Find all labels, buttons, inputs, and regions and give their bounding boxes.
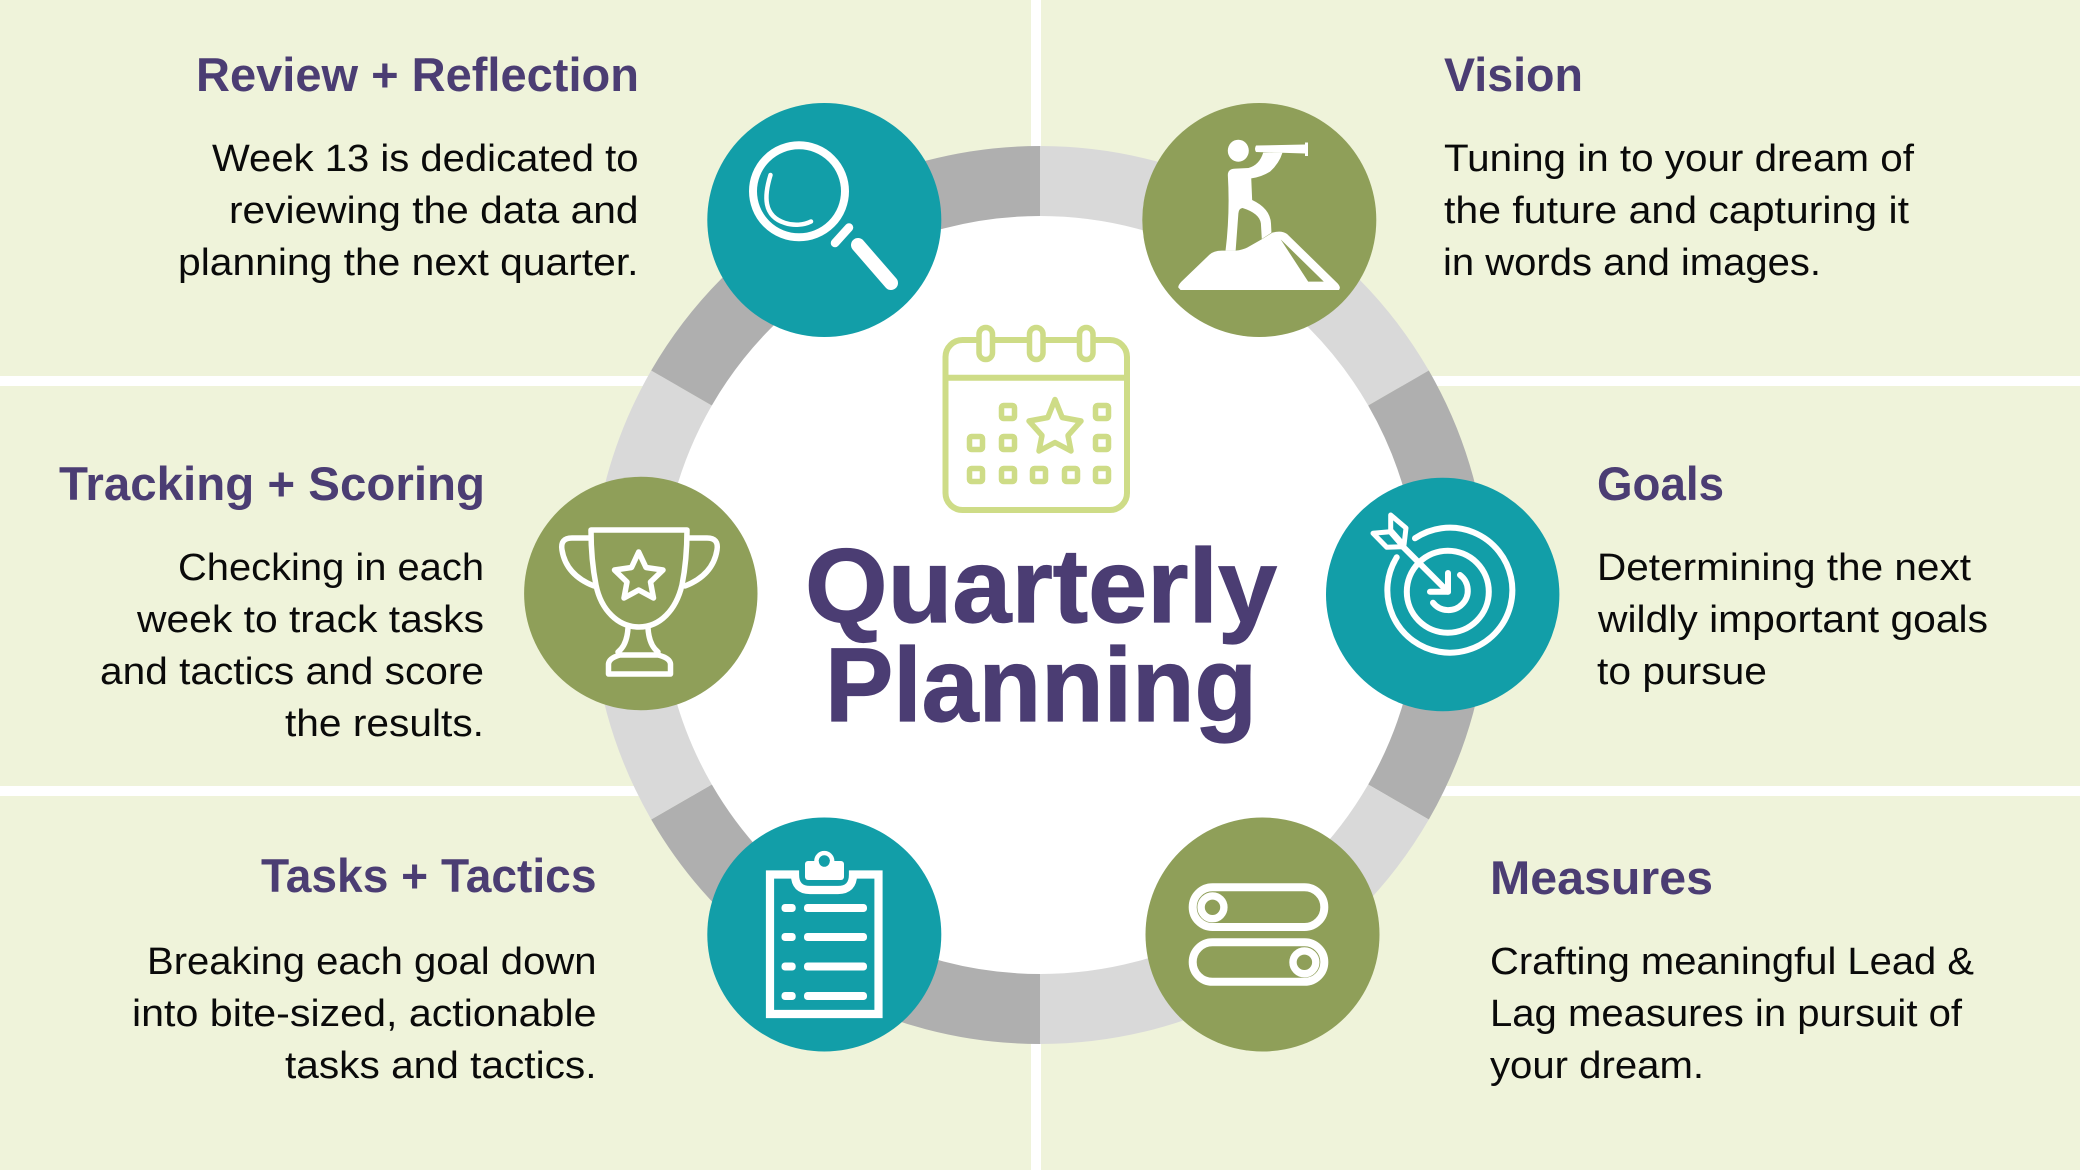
body: Tasks + Tactics: tasks and tactics. [285,1045,596,1087]
body: Tracking + Scoring: and tactics and score [100,651,484,693]
body: Measures: Lag measures in pursuit of [1490,993,1962,1035]
icon: clipboard checklist [707,818,941,1052]
panel: goals background [1041,386,2080,786]
heading: Tasks + Tactics: Tasks + Tactics [261,849,596,902]
title: Quarterly Planning: Planning [825,627,1257,744]
icon: magnifying glass [707,103,941,337]
text block: Vision [1443,48,1914,284]
panel: tracking background [0,386,1031,786]
body: Vision: Tuning in to your dream of [1444,138,1914,180]
segmented ring [626,181,1454,1009]
panel: vision background [1041,0,2080,376]
body: Review + Reflection [178,138,638,284]
body: Tracking + Scoring: week to track tasks [136,599,484,641]
icon: toggle switches [1146,818,1380,1052]
panel: review background [0,0,1031,376]
heading: Review + Reflection: Review + Reflection [196,48,639,101]
text block: Tracking + Scoring [59,457,485,745]
icon: target with arrow [1326,478,1559,711]
heading: Tracking + Scoring: Tracking + Scoring [59,457,485,510]
body: Tasks + Tactics: into bite-sized, actionable [132,993,596,1035]
body: Vision: the future and capturing it [1444,190,1909,232]
icon: calendar with star [946,328,1127,510]
panel: measures background [1041,796,2080,1170]
body: Tasks + Tactics [132,941,596,1087]
panel: tasks background [0,796,1031,1170]
body: Goals: wildly important goals [1597,599,1988,641]
icon: trophy [524,477,758,710]
body: Measures: Crafting meaningful Lead & [1490,941,1974,983]
body: Vision: in words and images. [1443,242,1821,284]
heading: Measures: Measures [1490,851,1713,904]
body: Goals [1597,547,1988,693]
body: Tasks + Tactics: Breaking each goal down [147,941,596,983]
body: Tracking + Scoring: the results. [285,703,484,745]
body: Tracking + Scoring [100,547,484,745]
body: Review + Reflection: Week 13 is dedicated to [212,138,638,180]
centre white disc [660,215,1420,975]
body: Review + Reflection: planning the next quarter. [178,242,638,284]
icon: person with telescope on mountain [1142,103,1376,337]
body: Goals: to pursue [1597,651,1767,693]
heading: Goals: Goals [1597,457,1724,510]
heading: Vision: Vision [1444,48,1583,101]
body: Review + Reflection: reviewing the data and [229,190,638,232]
body: Measures: your dream. [1490,1045,1704,1087]
body: Tracking + Scoring: Checking in each [178,547,484,589]
body: Vision [1443,138,1914,284]
title: Quarterly Planning [805,528,1277,744]
body: Goals: Determining the next [1597,547,1971,589]
text block: Tasks + Tactics [132,849,596,1087]
body: Measures [1490,941,1974,1087]
text block: Measures [1490,851,1974,1087]
text block: Review + Reflection [178,48,639,284]
title: Quarterly Planning: Quarterly [805,528,1277,645]
text block: Goals [1597,457,1988,693]
